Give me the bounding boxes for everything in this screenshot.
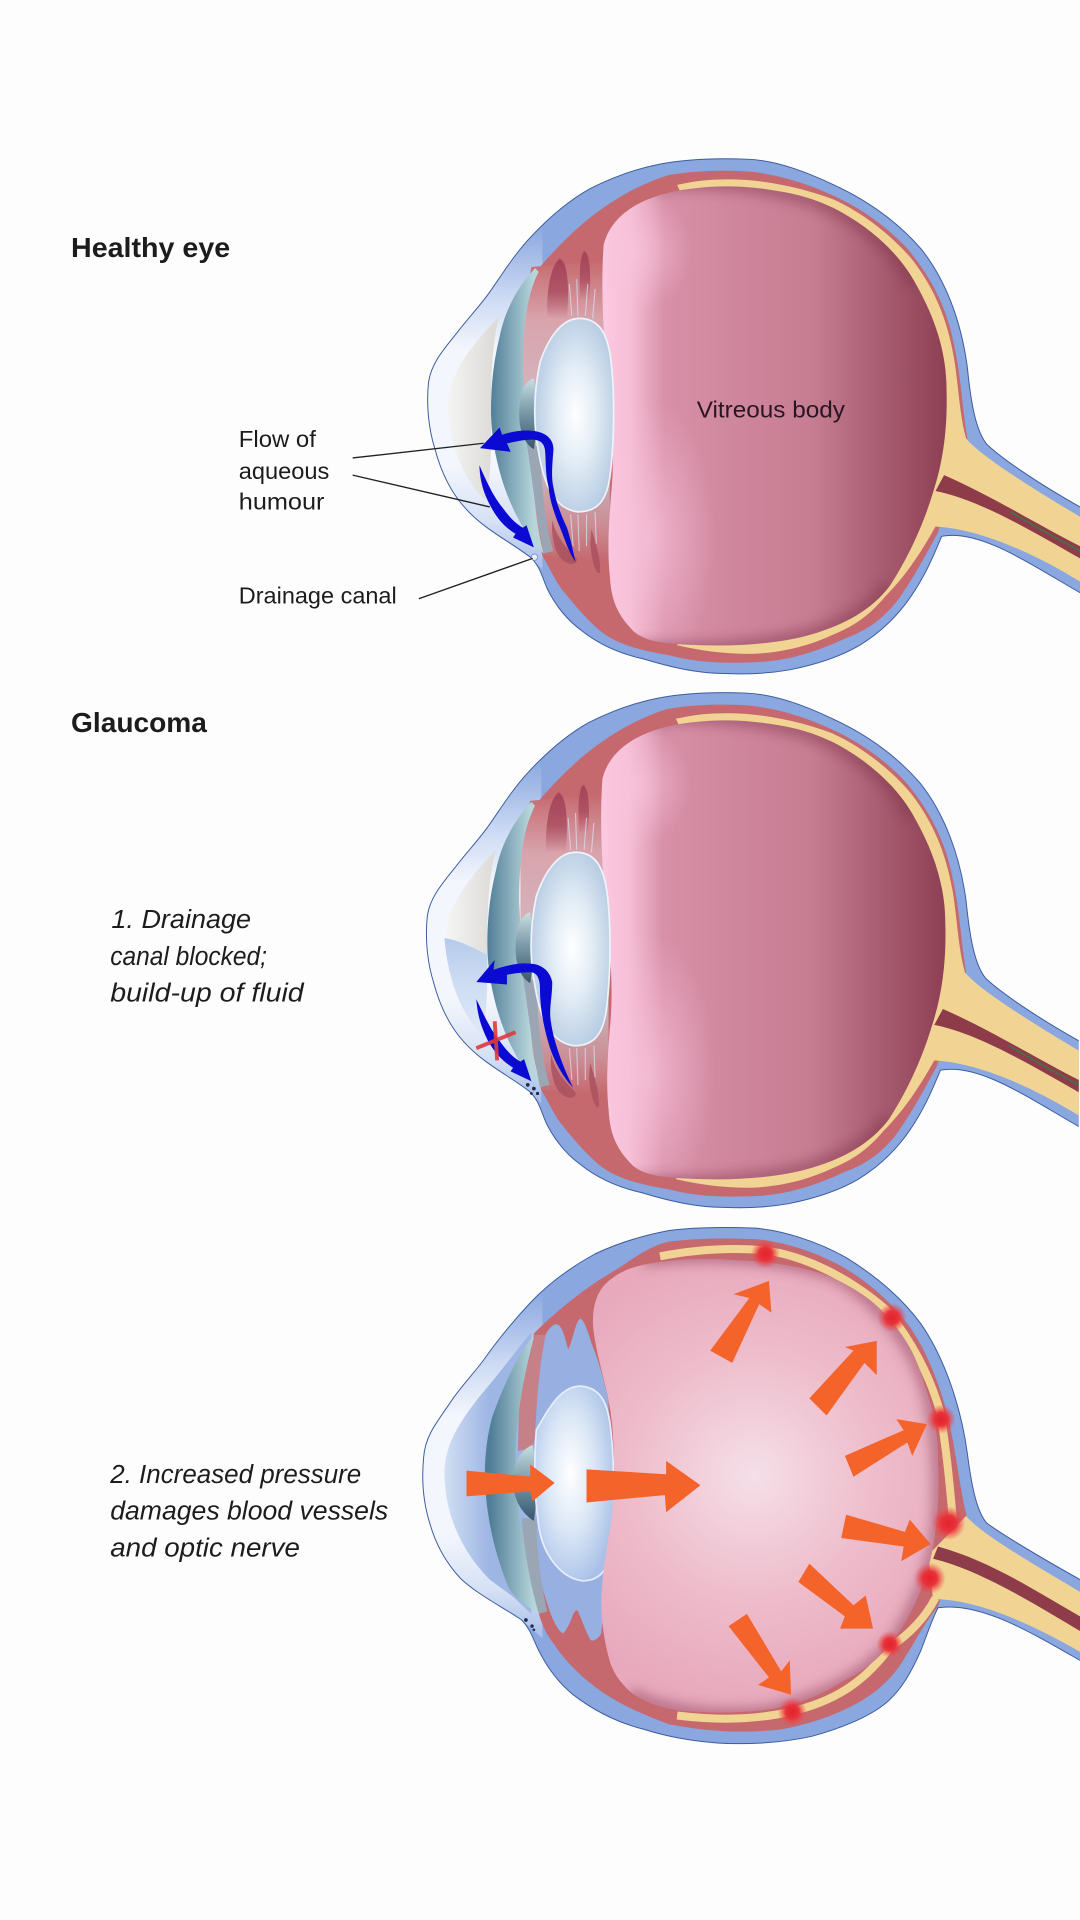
- anterior chamber filled with fluid: [444, 1333, 531, 1614]
- vitreous edge shading: [629, 1255, 940, 1716]
- label: flow of aqueous humour: humour: [239, 488, 325, 514]
- drainage canal debris: [524, 1618, 535, 1631]
- heading: healthy eye: Healthy eye: [71, 232, 230, 263]
- cornea: [423, 1291, 542, 1638]
- arrow: flow toward blocked canal: [476, 999, 531, 1081]
- caption: step 2: and optic nerve: [110, 1532, 300, 1562]
- pink strip behind iris: [518, 1335, 546, 1451]
- illustration: glaucoma, increased pressure: [423, 1227, 1080, 1744]
- label: drainage canal: Drainage canal: [239, 583, 397, 609]
- arrow: aqueous flow to drainage canal: [479, 465, 534, 547]
- choroid: [534, 1238, 967, 1732]
- pupil: [513, 1445, 539, 1521]
- heading: glaucoma: Glaucoma: [71, 707, 208, 738]
- arrow: aqueous flow into chamber: [480, 427, 576, 562]
- lens: [535, 1386, 614, 1581]
- illustration: healthy eye: [428, 159, 1080, 680]
- grey strip below pupil: [522, 1518, 547, 1614]
- caption: step 1: build-up of fluid: [110, 978, 305, 1008]
- illustration: glaucoma, blocked drainage: [426, 693, 1079, 1213]
- retina and optic nerve: [928, 1516, 1080, 1652]
- iris: [485, 1337, 539, 1614]
- iris and lens: [491, 268, 614, 553]
- sclera: [423, 1227, 1080, 1744]
- caption: step 2: 2. Increased pressure: [109, 1459, 361, 1489]
- vitreous body under pressure: [593, 1259, 938, 1712]
- damage spots: [751, 1239, 966, 1727]
- caption: step 2: [109, 1459, 388, 1562]
- central retinal vessel: [933, 1547, 1080, 1631]
- caption: step 1: canal blocked;: [110, 941, 267, 971]
- arrow: aqueous flow into chamber: [476, 960, 573, 1087]
- label: vitreous body: Vitreous body: [697, 397, 845, 423]
- label: flow of aqueous humour: [239, 426, 329, 514]
- posterior chamber filled with fluid: [530, 1319, 610, 1641]
- leader line: drainage canal: [419, 558, 533, 599]
- red cross: blockage: [476, 1021, 516, 1060]
- sclera outline: [423, 1227, 1080, 1744]
- caption: step 1: 1. Drainage: [111, 904, 251, 934]
- label: flow of aqueous humour: aqueous: [239, 458, 329, 484]
- pressure arrows: [467, 1281, 931, 1695]
- label: flow of aqueous humour: Flow of: [239, 426, 316, 452]
- eye anatomy base: [426, 693, 1079, 1213]
- anterior chamber: [446, 850, 496, 1033]
- iris and lens: [487, 802, 610, 1087]
- anterior chamber: [448, 316, 500, 500]
- caption: step 1: [110, 904, 305, 1008]
- drainage canal marker: [531, 554, 538, 560]
- caption: step 2: damages blood vessels: [110, 1496, 388, 1526]
- fluid build-up in chamber: [444, 938, 487, 1033]
- eye anatomy base: [428, 159, 1080, 680]
- leader lines: flow of aqueous humour: [353, 443, 490, 507]
- drainage canal debris: [526, 1083, 539, 1095]
